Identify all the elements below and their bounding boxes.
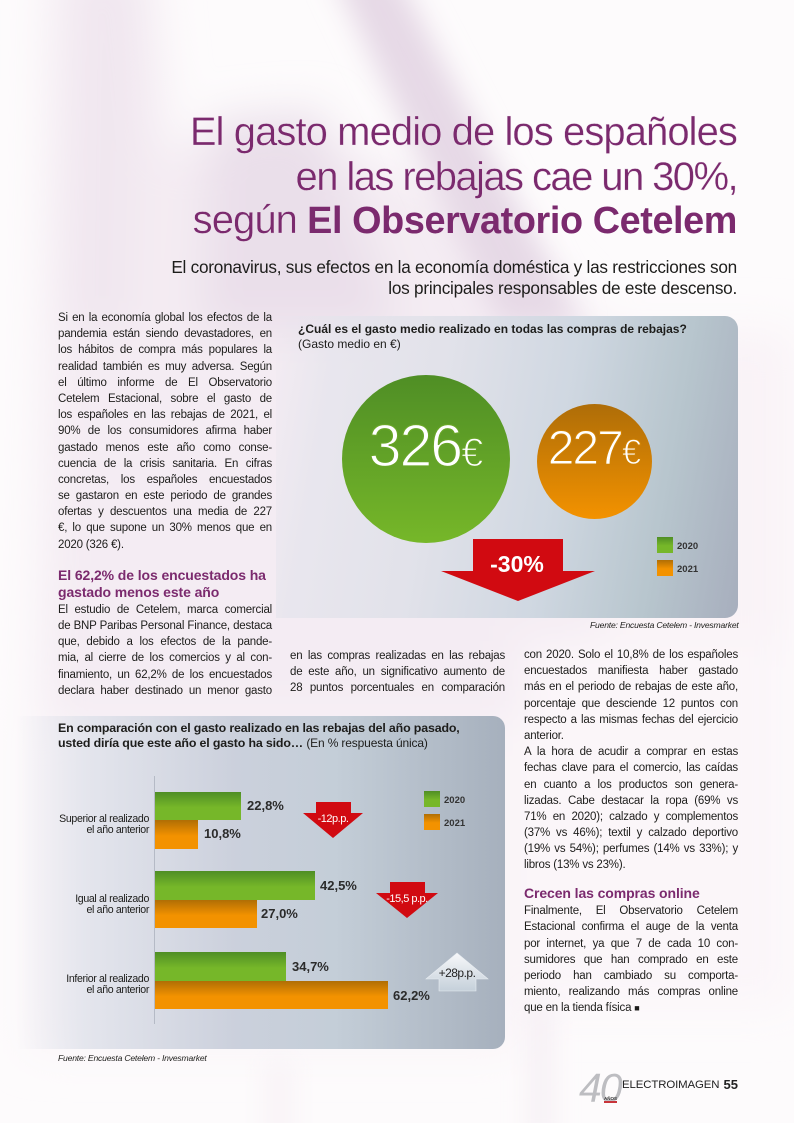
text column 3: sumidores que han comprado en este	[524, 954, 738, 966]
text column 1: finamiento, un 62,2% de los encuestados	[58, 669, 272, 681]
panel heading	[298, 322, 687, 350]
circle: 2020 value: 326€	[369, 413, 483, 479]
panel heading: (Gasto medio en €)	[298, 336, 401, 350]
text column 1: de BNP Paribas Personal Finance, destaca	[58, 620, 272, 632]
text column 3: por internet, ya que 7 de cada 10 con-	[524, 938, 738, 950]
subtitle	[171, 257, 737, 298]
row: Superior	[59, 792, 284, 849]
footer: magazine name and page number: 55	[724, 1077, 738, 1092]
text column 3: respecto a las mismas fechas del ejercicio	[524, 714, 738, 726]
circle: 2021 value	[537, 404, 652, 519]
title: en las rebajas cae un 30%,	[296, 155, 737, 199]
title: según El Observatorio Cetelem	[193, 198, 737, 242]
chart axis	[154, 776, 155, 1024]
row: Igual: 42,5%	[320, 878, 357, 893]
text column 3: anterior.	[524, 730, 564, 742]
row: Igual: el año anterior	[87, 904, 149, 916]
legend: 2020	[444, 795, 465, 806]
subtitle: El coronavirus, sus efectos en la economía doméstica y las restricciones son	[171, 257, 737, 277]
text column 3: periodo han cambiado su comporta-	[524, 970, 738, 982]
arrow: -12 p.p.	[303, 802, 363, 838]
text column 2: de este año, un significativo aumento de	[290, 666, 505, 678]
text column 3: con 2020. Solo el 10,8% de los españoles	[524, 649, 738, 661]
legend	[424, 791, 465, 830]
text column 1: El estudio de Cetelem, marca comercial	[58, 604, 272, 616]
text column 3: miento, realizando más compras online	[524, 986, 738, 998]
title	[190, 110, 737, 242]
panel heading: ¿Cuál es el gasto medio realizado en todas las compras de rebajas?	[298, 322, 687, 336]
text column 3: encuestados manifiesta haber gastado	[524, 665, 738, 677]
text column 1: Cetelem Estacional, sobre el gasto de	[58, 393, 272, 405]
text column 3: (19% vs 54%); perfumes (14% vs 33%); y	[524, 843, 738, 855]
legend: 2021	[444, 818, 465, 829]
text column 1: que, debido a los efectos de la pande-	[58, 636, 272, 648]
text column 3: Estacional confirma el auge de la venta	[524, 921, 738, 933]
text column 3: más en el periodo de rebajas de este año,	[524, 681, 738, 693]
text column 3: 71% en 2020); calzado y complementos	[524, 811, 738, 823]
legend: 2020	[677, 541, 698, 552]
text column 3: A la hora de acudir a comprar en estas	[524, 746, 738, 758]
text column 1: mia, al cierre de los comercios y al con-	[58, 652, 272, 664]
row: Inferior: 62,2%	[393, 988, 430, 1003]
text column 1: concretas, los españoles encuestados	[58, 474, 272, 486]
row: Superior: Superior al realizado	[59, 813, 149, 825]
circle: 2021 value: 227€	[548, 422, 641, 475]
text column 1: 90% de los consumidores afirma haber	[58, 425, 272, 437]
row: Inferior: el año anterior	[87, 984, 149, 996]
footer: magazine name and page number: ELECTROIMAGEN	[622, 1079, 719, 1091]
chart heading: En comparación con el gasto realizado en las rebajas del año pasado,	[58, 721, 460, 735]
chart heading	[58, 721, 460, 750]
row: Igual: 27,0%	[261, 906, 298, 921]
text column 3	[524, 649, 738, 1014]
text column 3: Finalmente, El Observatorio Cetelem	[524, 905, 738, 917]
text column 3: lizadas. Cabe destacar la ropa (69% vs	[524, 795, 738, 807]
text column 1: declara haber destinado un menor gasto	[58, 685, 272, 697]
logo: 40 años: 40	[579, 1065, 621, 1111]
text column 1: pandemia están siendo devastadores, en	[58, 328, 272, 340]
title: El gasto medio de los españoles	[190, 110, 737, 154]
text column 1: el último informe de El Observatorio	[58, 377, 272, 389]
text column 1: se gastaron en este periodo de grandes	[58, 490, 272, 502]
text column 1: realidad también es muy adversa. Según	[58, 361, 272, 373]
logo: 40 años: AÑOS	[604, 1096, 617, 1101]
legend	[657, 537, 698, 576]
arrow: -30%: -30%	[490, 551, 544, 577]
row: Superior: el año anterior	[87, 824, 149, 836]
source note: Fuente: Encuesta Cetelem - Invesmarket	[58, 1053, 207, 1063]
row: Inferior	[66, 952, 430, 1009]
panel: spending comparison	[16, 716, 505, 1049]
text column 1: ofertas y descuentos una media de 227	[58, 506, 272, 518]
text column 3: (37% vs 46%); textil y calzado deportivo	[524, 827, 738, 839]
arrow: +28 p.p.: +28p.p.	[439, 966, 476, 980]
footer: magazine name and page number	[622, 1077, 738, 1092]
row: Igual	[75, 871, 357, 928]
text column 3: Crecen las compras online	[524, 885, 700, 901]
text column 3: libros (13% vs 23%).	[524, 859, 625, 871]
text column 3: en cuanto a los productos son genera-	[524, 778, 738, 790]
text column 1: 2020 (326 €).	[58, 539, 124, 551]
row: Inferior: 34,7%	[292, 959, 329, 974]
legend: 2021	[677, 564, 698, 575]
row: Superior: 10,8%	[204, 826, 241, 841]
text column 1: cuencia de la crisis sanitaria. En cifras	[58, 458, 272, 470]
text column 2	[290, 650, 505, 694]
text column 2: 28 puntos porcentuales en comparación	[290, 682, 505, 694]
text column 1: los españoles en las rebajas de 2021, el	[58, 409, 272, 421]
text column 1: gastado menos este año	[58, 584, 219, 600]
text column 1: €, lo que supone un 30% menos que en	[58, 522, 272, 534]
text column 1	[58, 312, 272, 697]
text column 3: porcentaje que desciende 12 puntos con	[524, 698, 738, 710]
text column 1: gastado menos este año como conse-	[58, 442, 272, 454]
text column 3: fechas clave para el comercio, las caídas	[524, 762, 738, 774]
arrow: -15,5 p.p.: -15,5 p.p.	[386, 893, 428, 905]
row: Superior: 22,8%	[247, 798, 284, 813]
arrow: -15,5 p.p.	[376, 882, 438, 918]
row: Igual: Igual al realizado	[75, 893, 149, 905]
source note: Fuente: Encuesta Cetelem - Invesmarket	[590, 620, 739, 630]
arrow: -30%	[441, 539, 595, 601]
text column 2: en las compras realizadas en las rebajas	[290, 650, 505, 662]
text column 1: Si en la economía global los efectos de la	[58, 312, 272, 324]
row: Inferior: Inferior al realizado	[66, 973, 149, 985]
subtitle: los principales responsables de este descenso.	[388, 278, 737, 298]
chart heading: usted diría que este año el gasto ha sido… (En % respuesta única)	[58, 736, 428, 750]
arrow: +28 p.p.	[425, 952, 489, 992]
arrow: -12 p.p.: -12p.p.	[318, 813, 349, 825]
panel: average spend	[276, 316, 738, 618]
text column 1: los hábitos de compra más populares la	[58, 344, 272, 356]
text column 1: El 62,2% de los encuestados ha	[58, 567, 266, 583]
text column 3: que en la tienda física ■	[524, 1002, 640, 1014]
circle: 2020 value	[342, 375, 510, 543]
